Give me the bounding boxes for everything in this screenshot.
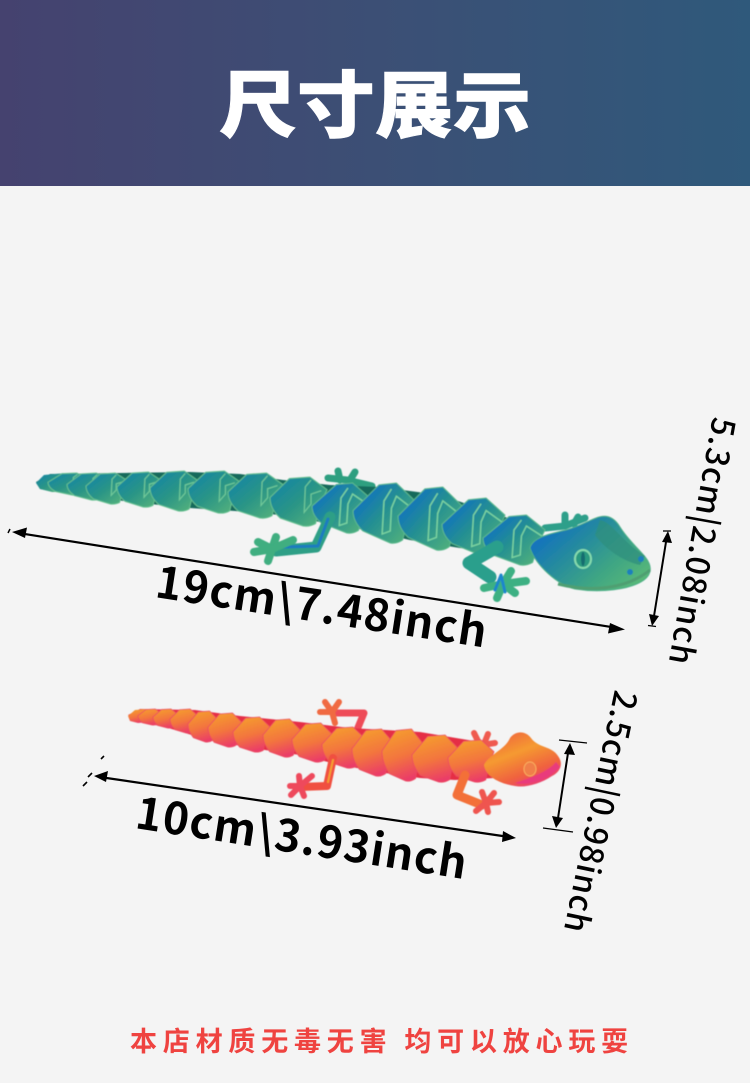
red lizard far front foot bbox=[462, 733, 495, 750]
header banner bbox=[0, 0, 750, 186]
green lizard body segments bbox=[36, 471, 545, 565]
footer note: 本店材质无毒无害 均可以放心玩耍 bbox=[130, 1020, 634, 1059]
arrow: green height bbox=[648, 531, 672, 626]
red lizard lower hind leg bbox=[290, 758, 333, 796]
arrow: green length bbox=[8, 528, 625, 634]
arrow: red length bbox=[83, 756, 516, 842]
label: red length: 10cm\3.93inch bbox=[132, 778, 472, 892]
label: green length: 19cm\7.48inch bbox=[152, 547, 492, 660]
green lizard head bbox=[530, 516, 650, 591]
red lizard body underlay bbox=[128, 709, 495, 780]
green lizard body underlay bbox=[36, 472, 545, 560]
arrow: red height bbox=[543, 740, 587, 832]
title: 尺寸展示 bbox=[219, 49, 531, 153]
red lizard front leg bbox=[457, 775, 499, 812]
red small lizard bbox=[128, 702, 561, 812]
green large lizard bbox=[36, 471, 650, 598]
red lizard upper hind leg and foot bbox=[320, 702, 364, 742]
label: red height: 2.5cm|0.98inch bbox=[554, 687, 650, 937]
red lizard head bbox=[484, 732, 561, 787]
red lizard body segments bbox=[128, 709, 494, 782]
label: green height: 5.3cm|2.08inch bbox=[659, 414, 748, 668]
green lizard front leg bbox=[469, 547, 526, 598]
green lizard hind leg bbox=[254, 517, 330, 561]
green lizard far front foot bbox=[545, 515, 585, 528]
green lizard far hind foot bbox=[328, 471, 372, 486]
